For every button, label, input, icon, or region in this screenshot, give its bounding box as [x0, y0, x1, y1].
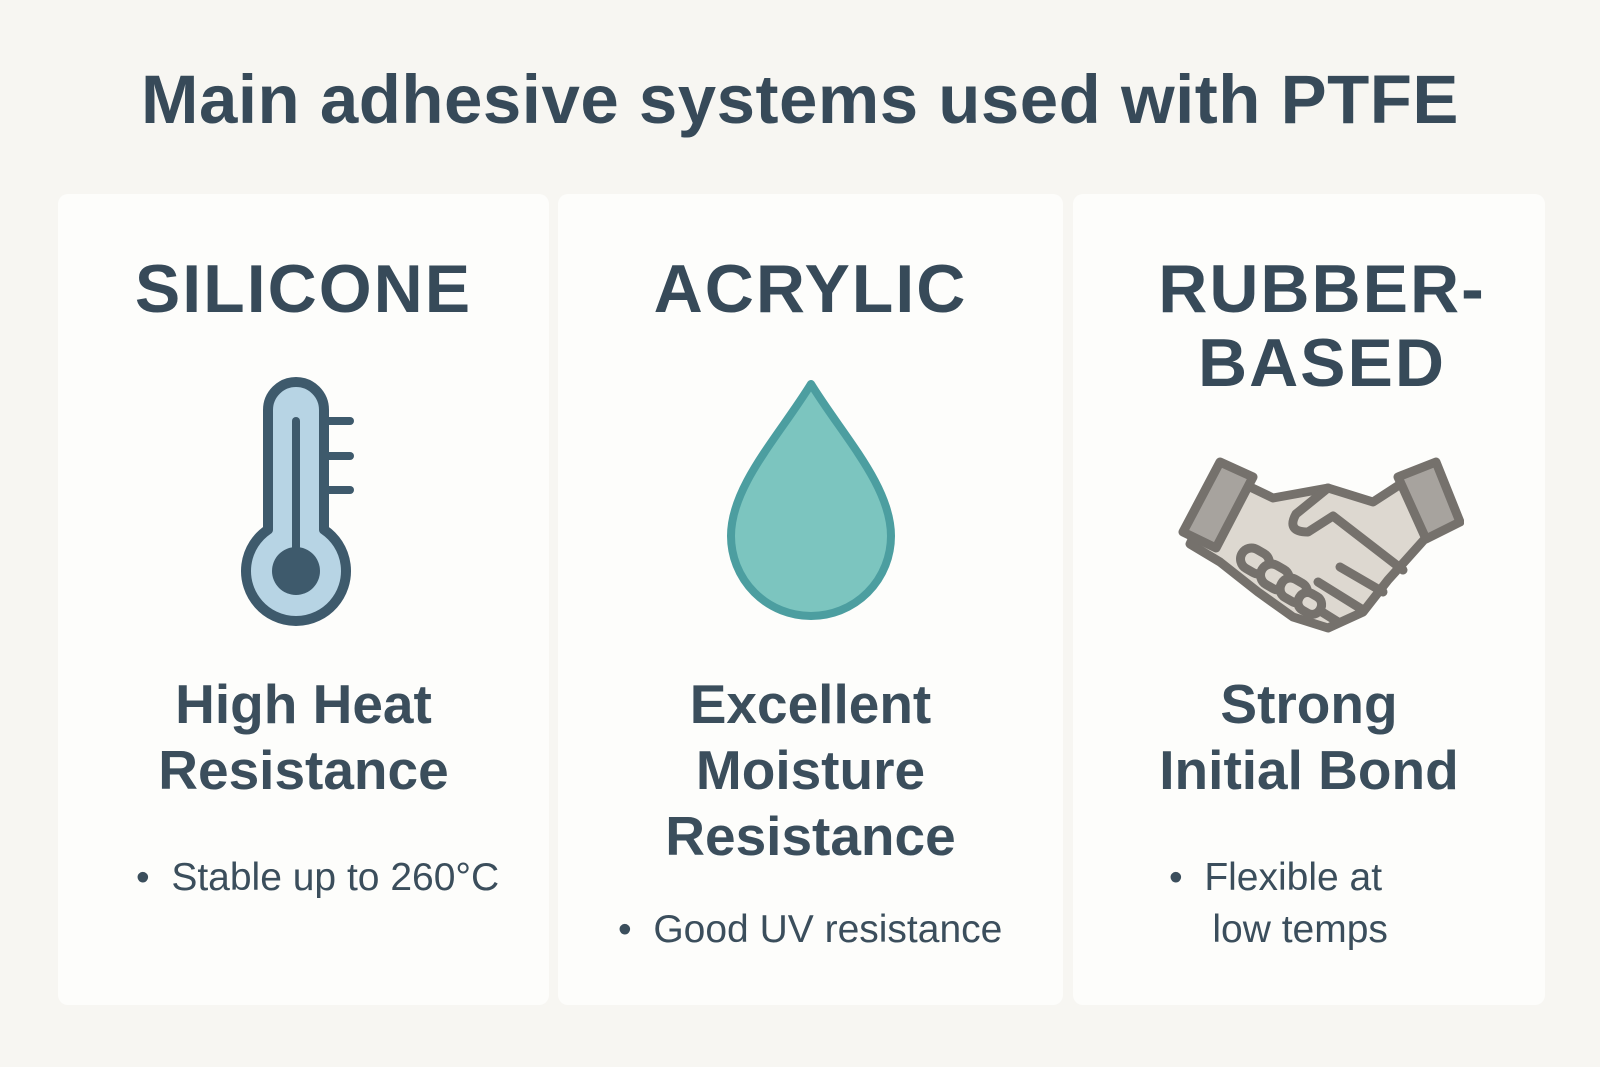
- heading: rubber-based: BASED: [1198, 325, 1446, 401]
- subtitle: high heat resistance: [158, 673, 449, 801]
- subtitle: strong initial bond: Strong: [1220, 673, 1398, 735]
- subtitle: excellent moisture resistance: Resistance: [665, 805, 956, 867]
- panel: silicone: [58, 194, 549, 1005]
- title: Main adhesive systems used with PTFE: [141, 61, 1459, 138]
- subtitle: excellent moisture resistance: Excellent: [690, 673, 931, 735]
- icon: thermometer: [241, 377, 354, 626]
- bullet: good uv resistance: • Good UV resistance: [618, 908, 1002, 951]
- subtitle: strong initial bond: [1159, 673, 1459, 801]
- heading: rubber-based: RUBBER-: [1158, 251, 1486, 327]
- bullet: flexible at low temps: low temps: [1212, 908, 1388, 951]
- icon: handshake: [1178, 458, 1464, 632]
- subtitle: strong initial bond: Initial Bond: [1159, 739, 1459, 801]
- bullet: stable up to 260°C: • Stable up to 260°C: [136, 856, 499, 899]
- bullet: flexible at low temps: [1169, 856, 1388, 951]
- subtitle: excellent moisture resistance: Moisture: [696, 739, 925, 801]
- heading: rubber-based: [1158, 251, 1486, 401]
- subtitle: excellent moisture resistance: [665, 673, 956, 867]
- bullet: flexible at low temps: • Flexible at: [1169, 856, 1382, 899]
- panel: acrylic: [558, 194, 1063, 1005]
- panel: rubber-based: [1073, 194, 1545, 1005]
- subtitle: high heat resistance: Resistance: [158, 739, 449, 801]
- icon: water drop: [727, 380, 895, 620]
- heading: acrylic: ACRYLIC: [654, 251, 967, 327]
- heading: silicone: SILICONE: [135, 251, 472, 327]
- subtitle: high heat resistance: High Heat: [175, 673, 432, 735]
